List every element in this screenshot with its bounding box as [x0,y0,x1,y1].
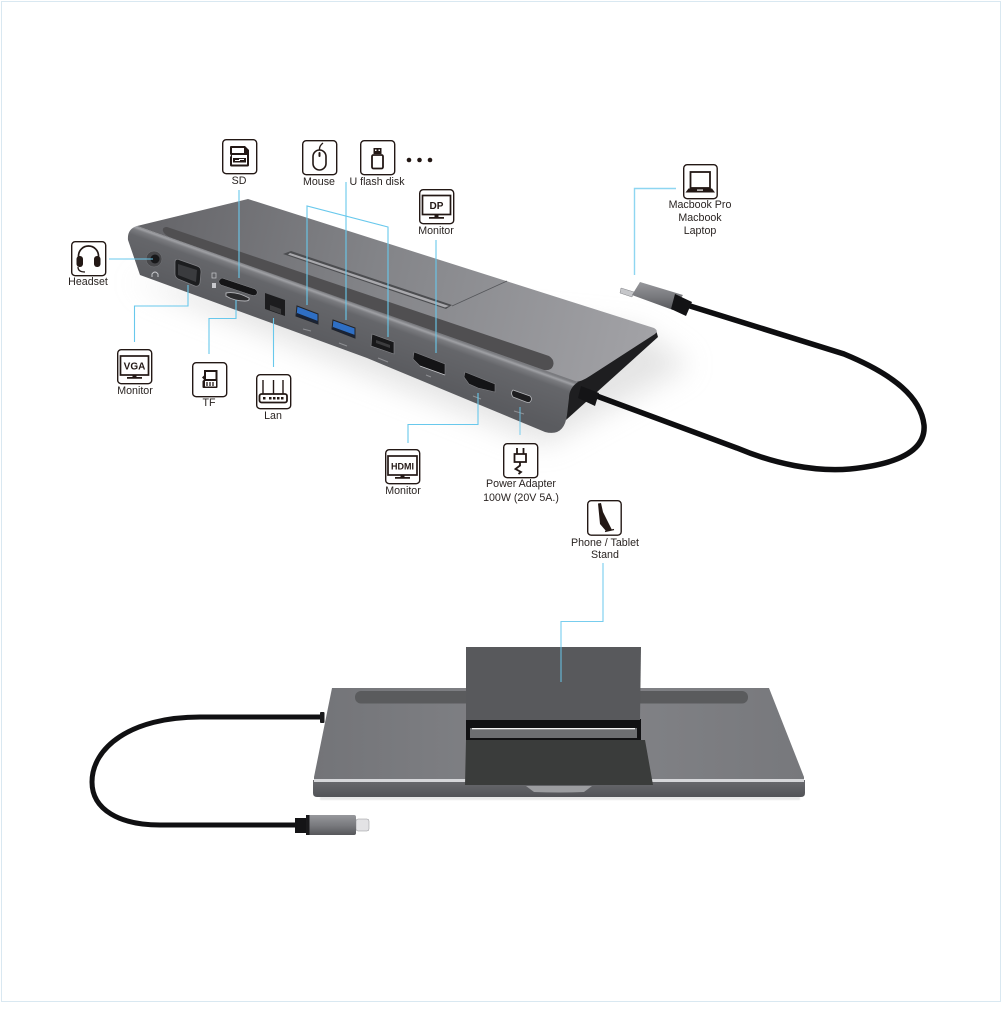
icon: DP monitor: DP [430,201,444,212]
leader line: DP [435,240,437,353]
port: USB-C [512,390,532,402]
label: Headset: Headset [68,276,108,288]
leader line: Lan [272,318,274,367]
port: USB 3.0 right [332,320,355,338]
label: Monitor (DP): Monitor [418,225,454,237]
leader line: SD [238,190,240,278]
port: RJ45 [265,293,285,316]
base plate top surface [314,688,804,781]
label: Phone / Tablet: Phone / Tablet [571,537,639,549]
callout: Lan [257,318,291,422]
callout: TF [193,300,236,409]
leader line: Stand [561,563,603,682]
cable [92,717,322,825]
callout: HDMI monitor [385,393,478,497]
icon: DP monitor [420,190,454,224]
label: Macbook Pro: Macbook Pro [669,199,731,211]
pull tab [526,786,592,792]
port: TF slot [226,293,249,301]
callout: Macbook / Laptop [634,165,731,275]
ellipsis dots [407,158,432,162]
leader line: U flash disk [345,182,347,320]
label: Macbook: Macbook [678,212,722,224]
USB-C plug [620,282,692,316]
callout: VGA monitor [117,285,188,397]
leader line: VGA [134,285,188,342]
port: USB 2.0 [371,334,394,354]
label: Monitor (HDMI): Monitor [385,485,421,497]
port: DisplayPort [413,352,445,375]
port: SD slot [219,278,257,296]
dock top surface [137,199,657,382]
stand slot [283,251,507,309]
port: VGA [175,259,201,286]
cable [594,306,924,470]
label: TF: TF [202,397,216,409]
base plate highlight [314,779,804,782]
dock front face [128,226,578,433]
callout: SD [223,140,257,278]
cable strain relief at dock [578,386,599,406]
label: Stand: Stand [591,549,619,561]
panel: docking station, front view [128,199,924,470]
icon: SD card [223,140,257,174]
icon: TF card [193,363,227,397]
port: HDMI [464,372,495,392]
cable strain relief [320,712,324,723]
port: USB 3.0 left [296,306,318,324]
icon: router [257,375,291,409]
label: Lan: Lan [264,410,282,422]
recessed strip [355,691,748,704]
stand back panel [466,647,641,720]
USB-C plug [295,815,369,835]
label: SD: SD [232,175,247,187]
label: Monitor (VGA): Monitor [117,385,153,397]
stand hinge [466,719,641,741]
leader line: Power [519,407,521,435]
port markings: tiny labels [303,329,524,414]
icon: mouse [303,141,337,175]
label: U flash disk: U flash disk [349,176,405,188]
callout: U flash disk [346,141,432,320]
shadow below rear dock [320,796,800,800]
callout: Mouse [303,141,388,337]
icon: headset [72,242,106,276]
callout: Headset [68,242,153,288]
stand front flap [465,740,653,785]
icon: laptop [684,165,717,199]
icon: HDMI monitor: HDMI [391,462,414,472]
icon: power plug [504,444,538,478]
callout: DP monitor [418,190,454,353]
base plate front edge [313,780,805,797]
label: Mouse: Mouse [303,176,335,188]
port markings: memory card icons [212,273,216,288]
callout: Power Adapter [483,407,559,504]
dock dark right side [566,330,658,420]
leader line: Headset [109,258,153,260]
icon: VGA monitor: VGA [124,362,145,372]
leader line: Mouse USB port [307,206,388,337]
icon: phone stand [588,501,621,535]
dock recessed strip [163,227,554,370]
panel: docking station, rear view with stand [92,647,805,835]
port: audio jack [146,251,162,277]
label: power rating: 100W (20V 5A.) [483,492,559,504]
icon: USB flash drive [361,141,395,175]
leader line: HDMI [408,393,478,443]
shadow under dock [130,280,690,445]
leader line: TF [209,300,236,354]
label: Power Adapter: Power Adapter [486,478,556,490]
callout: Phone / Tablet Stand [561,501,639,682]
label: Laptop: Laptop [684,225,716,237]
leader line: Laptop [634,188,676,275]
